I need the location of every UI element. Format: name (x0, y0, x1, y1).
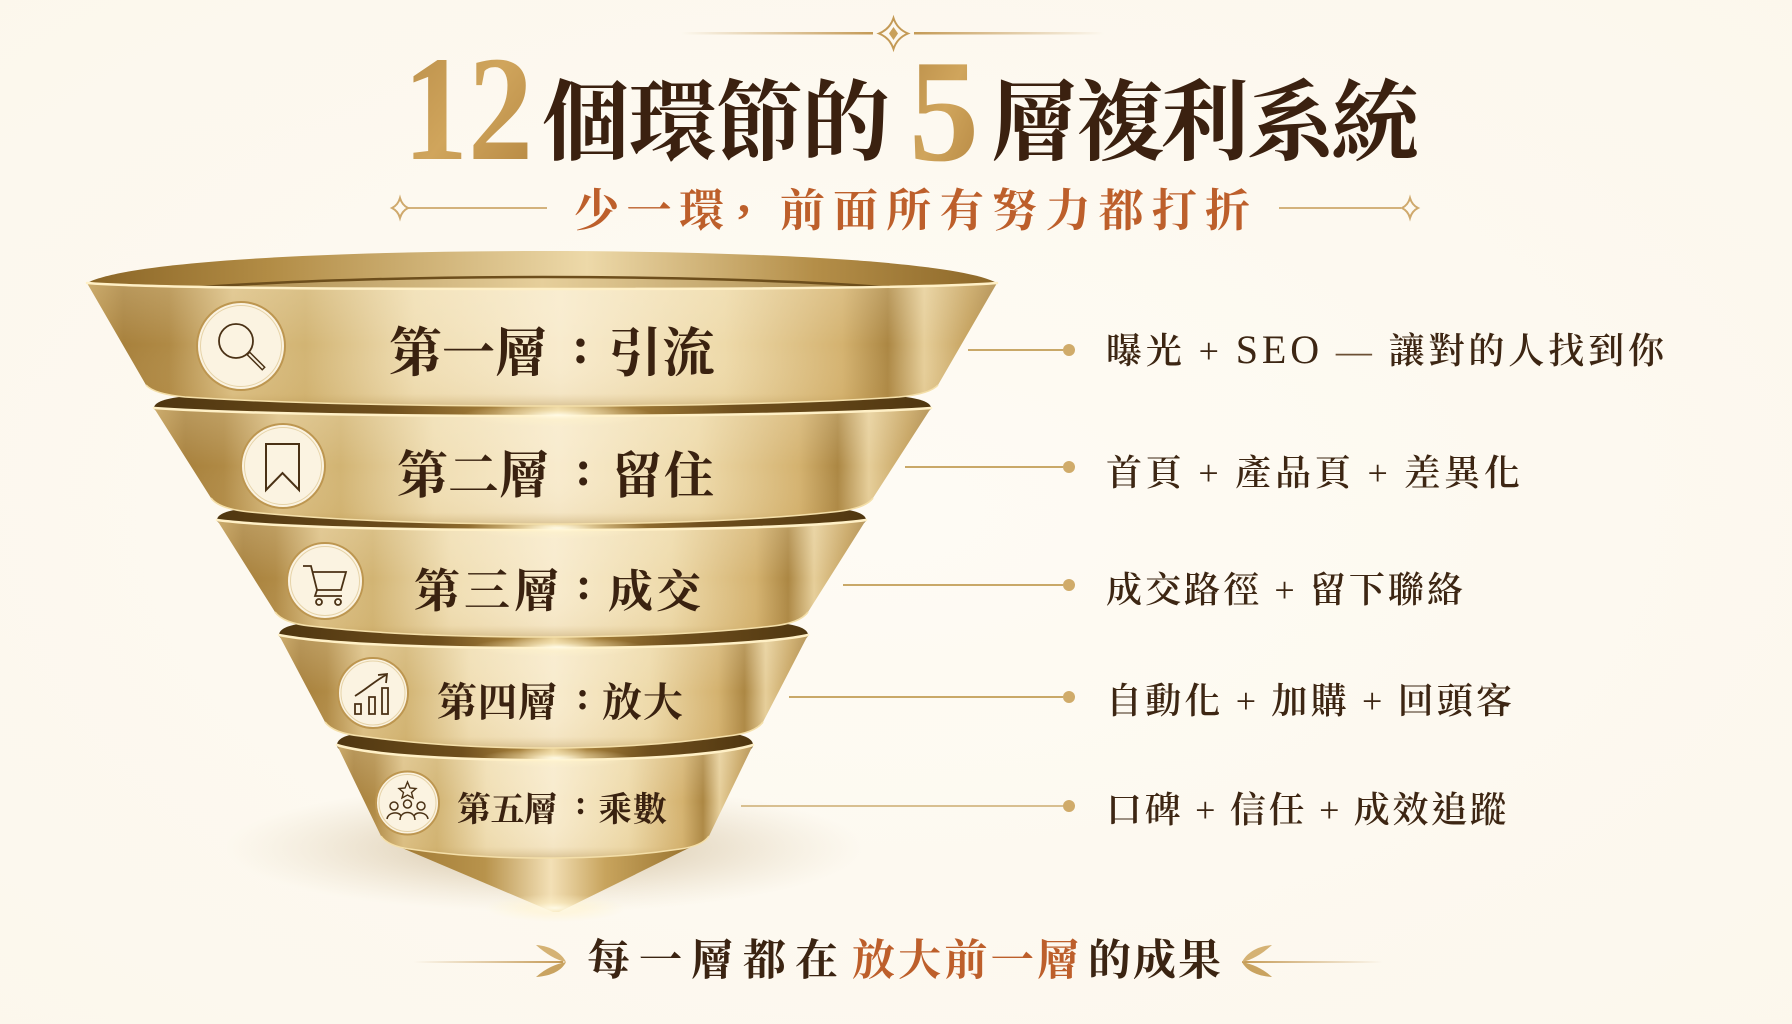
bottom caption: 放大前一層 (852, 937, 1080, 985)
connector and text: layer 2 (905, 453, 1520, 493)
icon: people and star (376, 772, 439, 834)
layer 2 band (154, 396, 931, 524)
layer 1 band with rim (87, 251, 997, 406)
title: 層複利系統 (991, 76, 1425, 173)
bottom caption (587, 937, 1221, 985)
title (403, 26, 1425, 192)
connector and text: layer 4: 自動化 + 加購 + 回頭客 (1106, 681, 1512, 721)
top ornament (681, 18, 1104, 49)
layer 4 label: 第四層 (437, 680, 558, 725)
layer 3 band (217, 508, 866, 637)
bottom caption: 的成果 (1088, 937, 1221, 985)
layer 2 label: 留住 (612, 448, 714, 504)
layer 4 label: 放大 (602, 680, 683, 725)
layer 5 band (337, 733, 753, 858)
bottom right arrow (1242, 945, 1383, 977)
funnel shadow (225, 784, 865, 912)
layer 1 label: 引流 (609, 325, 715, 383)
funnel tip (395, 845, 695, 922)
icon: shopping cart (287, 543, 363, 619)
bottom left arrow (413, 945, 566, 977)
layer 5 label (457, 785, 667, 829)
title: 12 (403, 26, 533, 192)
subtitle: 前面所有努力都打折 (780, 186, 1250, 236)
layer 3 label: 成交 (608, 567, 702, 617)
subtitle: 少一環 (574, 186, 724, 236)
bottom caption: 每一層都在 (587, 937, 838, 985)
layer 5 label: 乘數 (598, 791, 667, 829)
layer 4 label: : (576, 673, 589, 718)
icon: bookmark (241, 424, 325, 508)
icon: magnifier (197, 302, 285, 390)
layer 2 label (397, 440, 714, 505)
layer 4 band (279, 623, 808, 748)
layer 3 label (414, 558, 702, 617)
layer 4 label (437, 673, 683, 725)
connector and text: layer 3 (843, 570, 1463, 610)
connector and text: layer 5 (741, 790, 1507, 830)
layer 1 label: 第一層 (389, 324, 548, 383)
layer 1 label (389, 318, 715, 383)
layer 5 label: : (575, 785, 586, 822)
connector and text: layer 2: 首頁 + 產品頁 + 差異化 (1106, 453, 1520, 493)
icon: growth chart (338, 658, 408, 728)
title: 5 (909, 30, 979, 192)
layer 3 label: : (576, 558, 591, 609)
layer 2 label: 第二層 (397, 448, 550, 505)
subtitle: , (738, 170, 750, 223)
subtitle (392, 170, 1418, 236)
funnel (87, 251, 997, 922)
layer 3 label: 第三層 (414, 566, 560, 617)
layer 1 label: : (572, 318, 589, 375)
layer 5 label: 第五層 (457, 791, 558, 829)
layer 2 label: : (575, 440, 592, 496)
connector and text: layer 5: 口碑 + 信任 + 成效追蹤 (1106, 790, 1507, 830)
connector and text: layer 4 (789, 681, 1512, 721)
connector and text: layer 1: 曝光 + SEO — 讓對的人找到你 (1106, 327, 1666, 372)
title: 個環節的 (542, 76, 890, 173)
connector and text: layer 3: 成交路徑 + 留下聯絡 (1106, 570, 1463, 610)
